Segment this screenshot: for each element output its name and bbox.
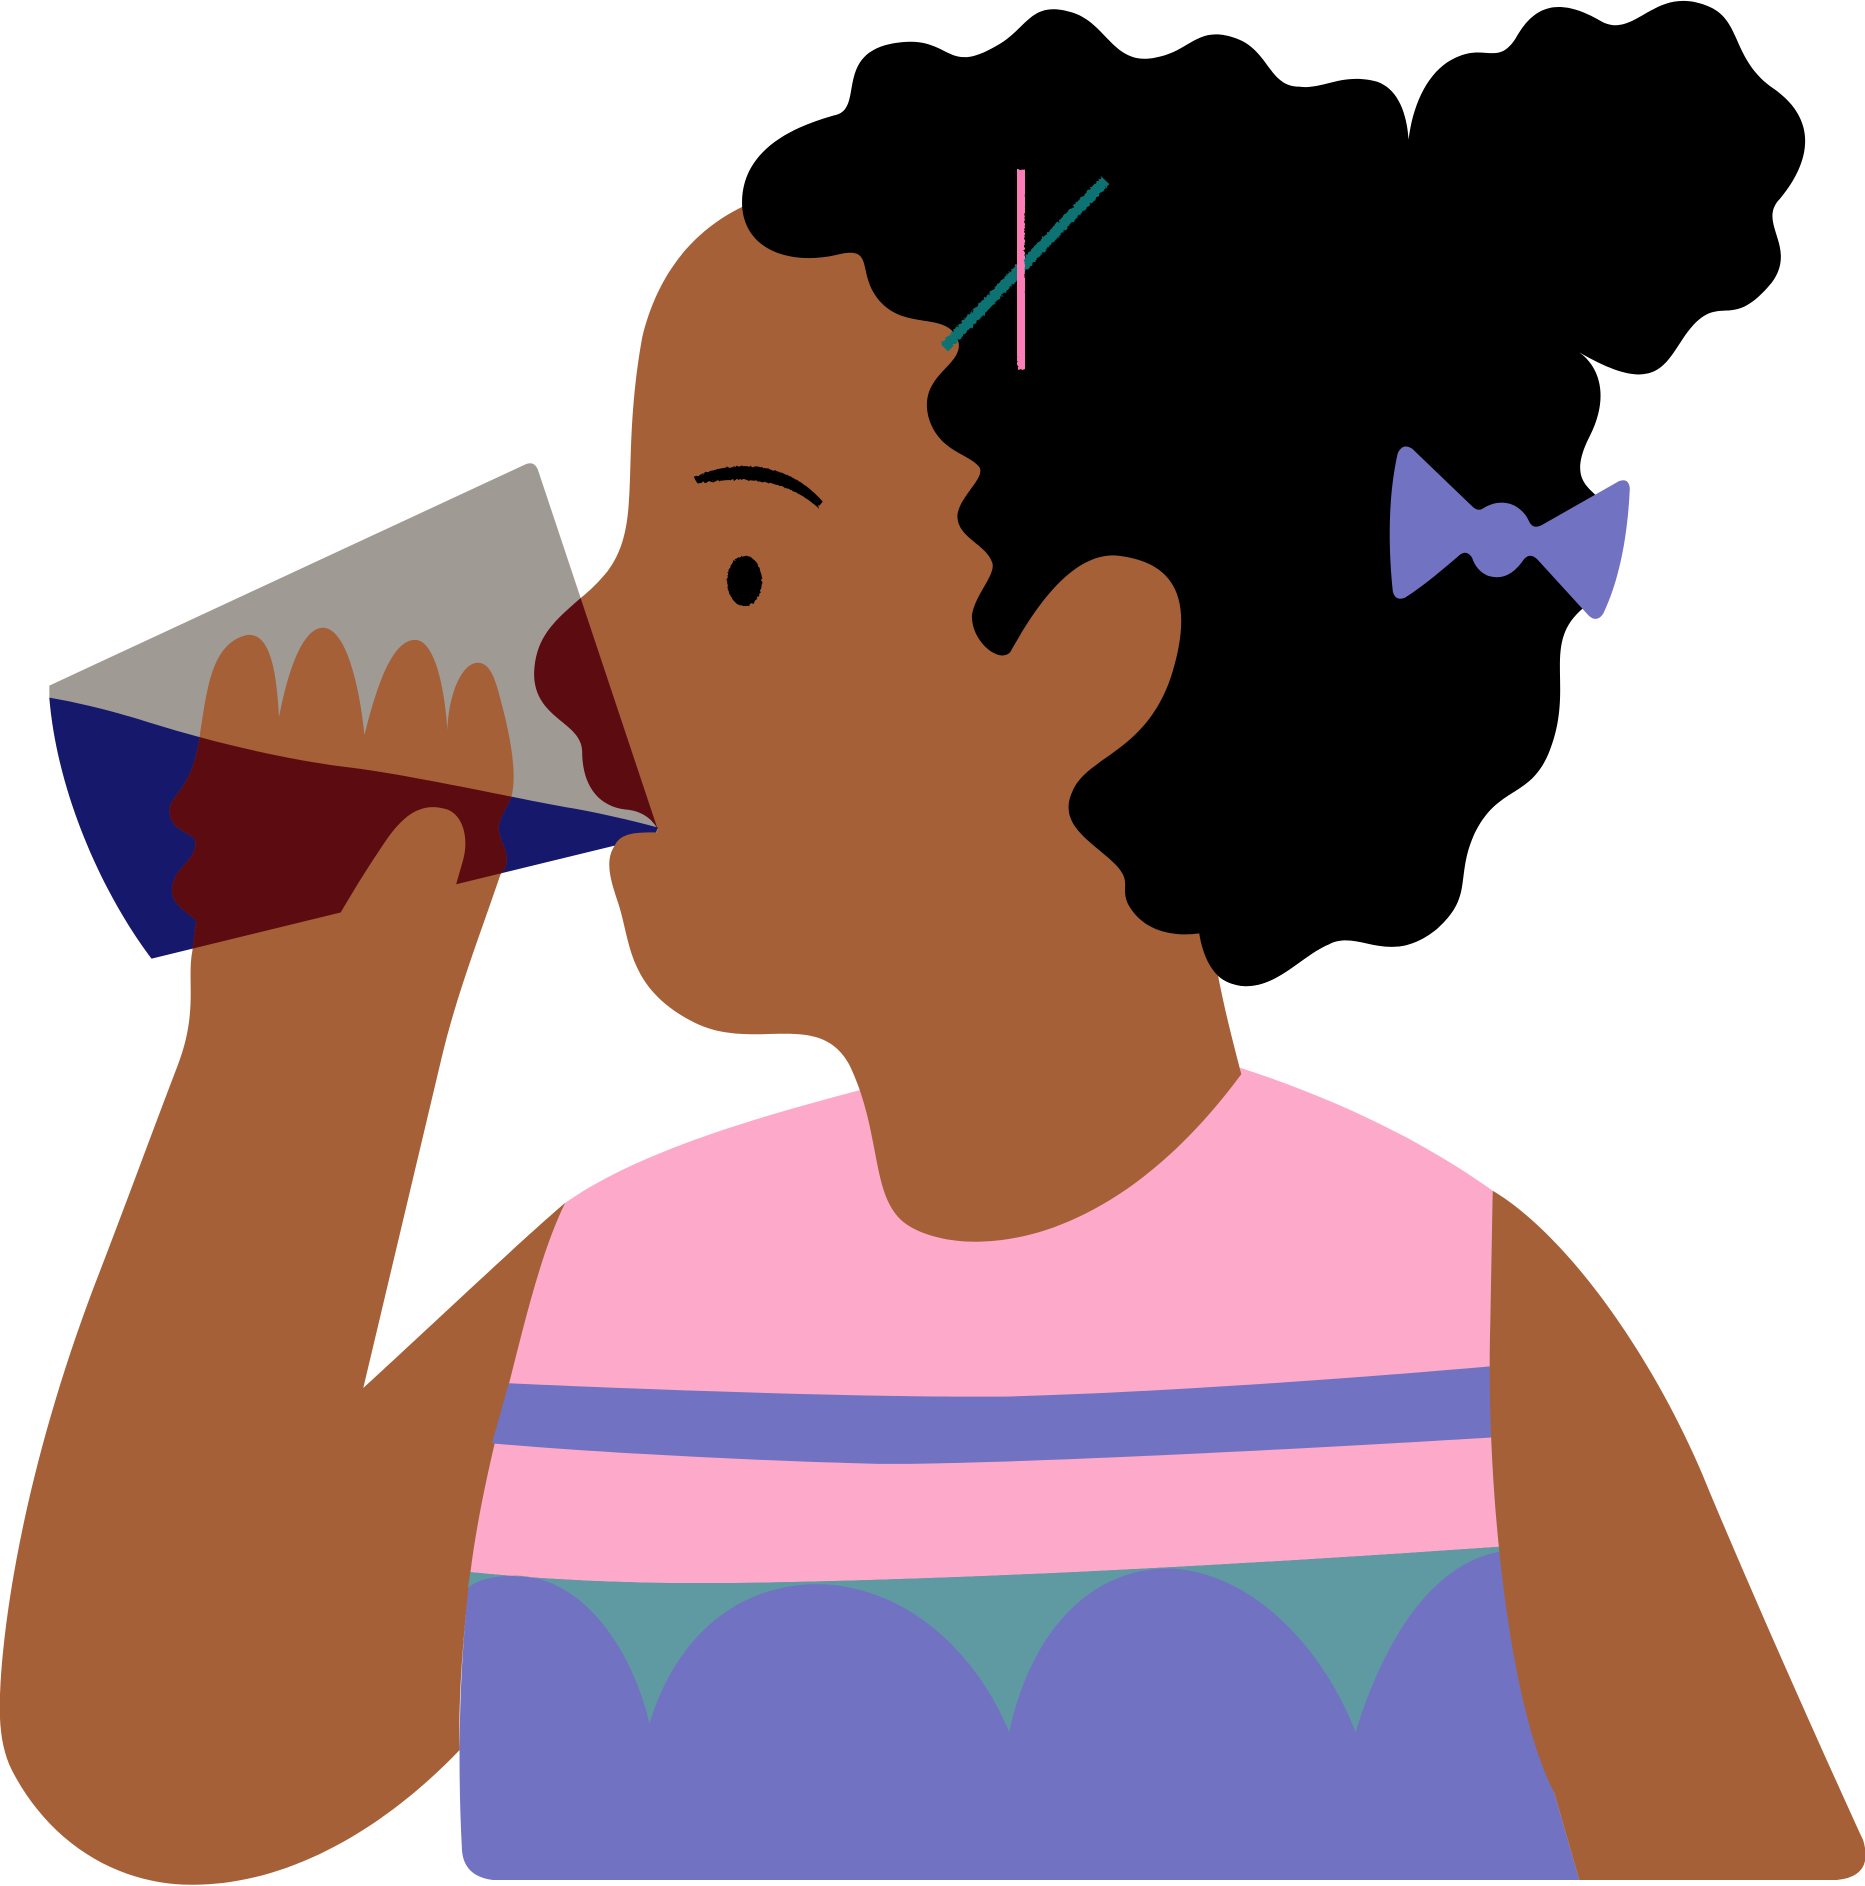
left arm and hand [0,628,565,1885]
shirt: purple lower panel [460,1547,1579,1880]
glass: liquid [49,698,658,959]
fingers over glass [170,628,514,1083]
hand seen through liquid [170,737,512,949]
face and neck [534,207,1241,1242]
eyebrow [694,466,823,508]
shirt: stripe [492,1366,1493,1464]
hair front over face [742,72,1504,986]
shirt: pink [457,1068,1500,1612]
cheek seen through glass [534,598,658,828]
thumb [340,807,500,950]
hair clip: pink [1019,170,1024,369]
shirt: teal scalloped band [468,1547,1500,1732]
hair bow [1390,446,1630,619]
glass [49,463,658,959]
right arm [1490,1191,1865,1880]
hair clip: teal [944,180,1105,348]
hair [742,1,1805,986]
glass: empty upper part [49,463,658,959]
lip in front of glass [615,832,664,859]
eye [727,556,762,606]
